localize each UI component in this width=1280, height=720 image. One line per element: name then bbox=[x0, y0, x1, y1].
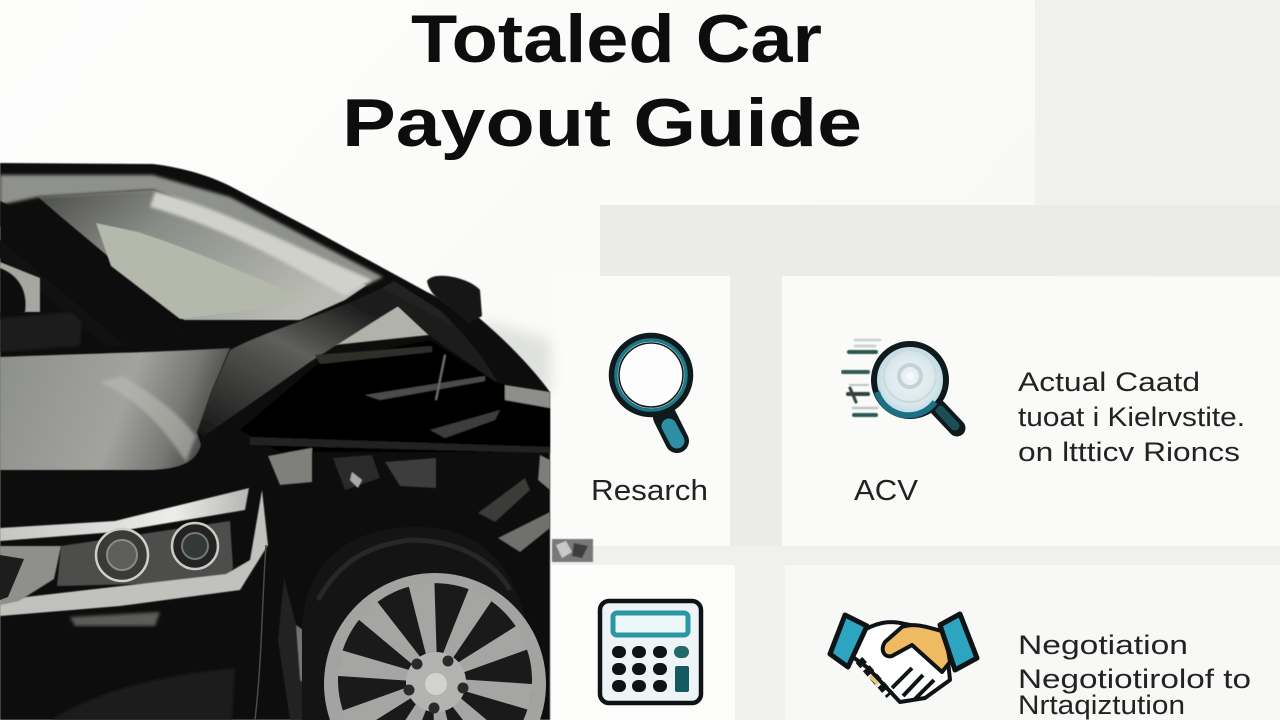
panel: negotiation card bbox=[785, 565, 1280, 720]
seat and interior bbox=[0, 268, 26, 320]
roof sheen bbox=[0, 175, 383, 285]
text block: negotiation: Negotiotirolof to bbox=[1018, 664, 1251, 694]
headlight housing bbox=[57, 521, 233, 586]
glass below hood fold bbox=[325, 306, 429, 346]
text block: actual cash value bbox=[1018, 367, 1245, 467]
car body silhouette bbox=[0, 163, 550, 720]
title: Payout Guide bbox=[342, 85, 862, 161]
fender tear bbox=[278, 578, 322, 720]
title bbox=[342, 1, 862, 161]
text block: negotiation: Nrtaqiztution bbox=[1018, 690, 1185, 720]
haze behind front fender bbox=[480, 320, 550, 395]
image: wrecked black car bbox=[0, 163, 550, 720]
windshield bright strip bbox=[150, 192, 372, 296]
icon: research magnifying glass bbox=[612, 336, 690, 441]
label: research: Resarch bbox=[591, 475, 708, 507]
wheel arch tyre bbox=[302, 527, 538, 720]
panel: research card bbox=[552, 277, 730, 546]
panel: calculator card bbox=[552, 565, 735, 720]
windshield glass bbox=[96, 223, 306, 319]
panel gap line bbox=[255, 545, 266, 720]
damaged engine bay bbox=[240, 340, 550, 552]
icon: ACV magnifying glass with data lines bbox=[843, 340, 957, 428]
hood bbox=[0, 348, 230, 470]
data lines bbox=[843, 340, 880, 415]
headlight lens left bbox=[96, 529, 148, 581]
headlight lens right bbox=[172, 523, 218, 569]
text block: actual cash value: Actual Caatd bbox=[1018, 367, 1200, 397]
A pillar bbox=[0, 201, 191, 339]
hood crumple fold bbox=[195, 281, 497, 437]
alloy wheel bbox=[324, 573, 546, 720]
label: ACV: ACV bbox=[854, 475, 919, 507]
text block: negotiation: Negotiation bbox=[1018, 630, 1188, 660]
headlight chrome strip bbox=[0, 488, 249, 541]
lower bumper reflections bbox=[70, 612, 160, 626]
panel: ACV card bbox=[782, 277, 1280, 546]
background layout blocks bbox=[552, 0, 1280, 720]
side window bbox=[0, 262, 40, 312]
grille bbox=[0, 546, 61, 605]
mirror bbox=[427, 276, 482, 324]
windshield interior bbox=[38, 190, 367, 320]
title: Totaled Car bbox=[411, 1, 822, 77]
text block: actual cash value: on lttticv Rioncs bbox=[1018, 437, 1240, 467]
text block: negotiation bbox=[1018, 630, 1251, 720]
glitch patch bbox=[552, 539, 593, 562]
headlight lower chrome bbox=[0, 490, 268, 616]
text block: actual cash value: tuoat i Kielrvstite. bbox=[1018, 402, 1245, 432]
icon: handshake bbox=[830, 614, 977, 702]
icon: calculator bbox=[600, 601, 701, 703]
